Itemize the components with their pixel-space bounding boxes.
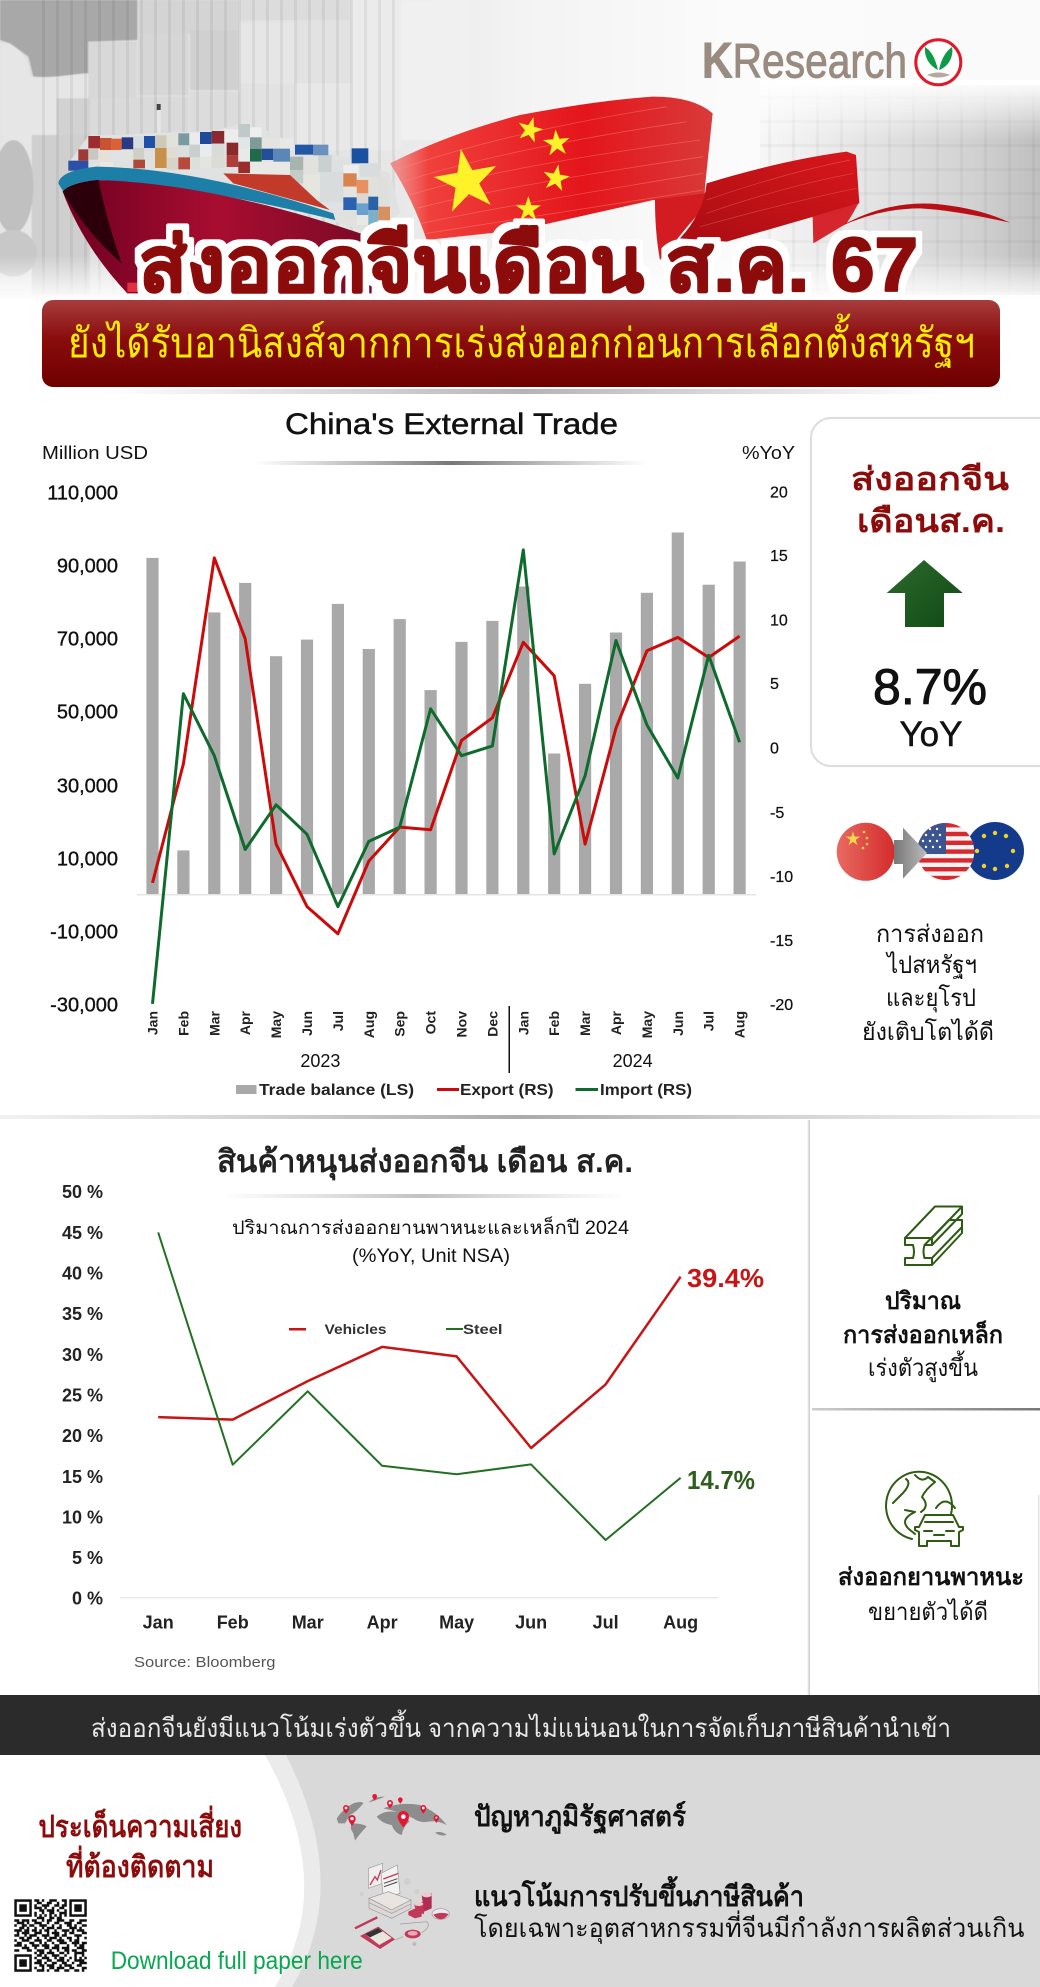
y axis labels: 30 % [62,1345,103,1365]
left axis labels [47,482,118,1016]
month labels [144,1010,748,1038]
x axis labels: Jan [143,1612,174,1632]
download link text: Download full paper here [111,1947,363,1975]
chart subtitle: ปริมาณการส่งออกยานพาหนะและเหล็กปี 2024 [232,1215,629,1239]
right axis labels [770,484,793,1014]
chart legend: Export (RS) [460,1082,554,1099]
month labels: May [268,1011,284,1038]
left axis labels: 30,000 [57,776,118,798]
chart legend: Import (RS) [600,1082,692,1099]
logo wordmark: KResearch [702,32,907,88]
month labels: Sep [392,1011,408,1037]
x axis labels: May [439,1612,474,1632]
year labels: 2023 [300,1051,340,1071]
flag stars [430,114,572,220]
month labels: Apr [237,1010,253,1035]
icon: tax documents illustration [355,1863,449,1949]
text: exports to US and Europe: ไปสหรัฐฯ [885,951,977,979]
month labels: Feb [546,1011,562,1036]
icon: globe and car [886,1472,963,1546]
export line [152,558,740,934]
vehicles line [158,1277,681,1448]
icon: up arrow [887,560,963,627]
icon: flags China to US and EU [837,822,1024,881]
x axis labels: Jun [515,1612,547,1632]
text: steel export volume: เร่งตัวสูงขึ้น [868,1350,978,1383]
left axis labels: 10,000 [57,848,118,870]
cargo ship [58,104,400,293]
left axis labels: 50,000 [57,702,118,724]
text: exports to US and Europe: การส่งออก [876,921,984,948]
QR code [11,1896,90,1975]
chart legend [236,1082,692,1099]
month labels: Jun [299,1011,315,1036]
x axis labels [143,1612,698,1632]
y axis labels: 20 % [62,1426,103,1446]
import line [152,550,740,1004]
right axis labels: -5 [770,805,784,822]
logo emblem [916,40,961,85]
month labels: Apr [608,1010,624,1035]
left axis labels: -10,000 [50,922,118,944]
y axis labels: 45 % [62,1223,103,1243]
left axis labels: 70,000 [57,628,118,650]
left axis labels: -30,000 [50,994,118,1016]
right column dividers [807,1120,1040,1695]
right axis labels: 10 [770,612,788,630]
subtitle banner [42,300,1000,387]
card heading [851,461,1009,539]
title: ส่งออกจีนเดือน ส.ค. 67 [139,223,918,308]
y axis labels: 15 % [62,1467,103,1487]
text: tariff trend: โดยเฉพาะอุตสาหกรรมที่จีนมีกำลังการผลิตส่วนเกิน [474,1910,1025,1944]
icon: steel beam [905,1206,962,1265]
month labels: Mar [206,1010,222,1036]
legend: Steel [463,1321,502,1337]
month labels: Jul [330,1011,346,1031]
text: vehicle exports: ขยายตัวได้ดี [868,1598,988,1626]
text: steel export volume: การส่งออกเหล็ก [843,1320,1003,1349]
month labels: Aug [361,1011,377,1038]
x axis labels: Apr [367,1612,398,1632]
legend [289,1321,502,1337]
text: steel export volume: ปริมาณ [885,1288,961,1315]
band: key message: ส่งออกจีนยังมีแนวโน้มเร่งตัวขึ้น จากความไม่แน่นอนในการจัดเก็บภาษีสินค้านำเข้า [91,1709,951,1743]
year labels [300,1051,653,1071]
steel line [158,1232,681,1540]
chart heading: สินค้าหนุนส่งออกจีน เดือน ส.ค. [217,1144,633,1181]
month labels: May [639,1011,655,1038]
right axis labels: 20 [770,484,788,502]
month labels: Jun [670,1011,686,1036]
card heading: เดือนส.ค. [857,503,1005,539]
right axis labels: -10 [770,869,793,886]
text: exports to US and Europe: ยังเติบโตได้ดี [862,1018,994,1046]
right axis labels: 5 [770,676,779,693]
text: tariff trend [474,1875,1025,1944]
chart: vehicle and steel export volume: (%YoY, Unit NSA) [352,1246,510,1267]
x axis labels: Feb [217,1612,249,1632]
y axis labels: 5 % [72,1548,103,1568]
chart: vehicle and steel export volume [62,1144,764,1671]
risk panel heading: ประเด็นความเสี่ยง [38,1805,242,1844]
right axis unit: %YoY [742,443,795,463]
text: steel export volume [843,1288,1003,1383]
left axis unit: Million USD [42,443,148,463]
month labels: Nov [454,1011,470,1037]
y axis labels [62,1182,103,1608]
y axis labels: 50 % [62,1182,103,1202]
month labels: Oct [423,1011,439,1034]
year labels: 2024 [613,1051,653,1071]
logo: KResearch [702,32,961,88]
right axis labels: -20 [770,997,793,1014]
text: geopolitical issues: ปัญหาภูมิรัฐศาสตร์ [474,1801,686,1835]
ribbon: Chinese flag [390,97,1010,260]
trade balance bars [146,532,746,895]
y axis labels: 40 % [62,1264,103,1284]
x axis labels: Mar [292,1612,324,1632]
source: Source: Bloomberg [134,1654,276,1671]
chart: China's External Trade [42,408,795,1099]
right axis labels: -15 [770,933,793,950]
growth figure: 8.7% [873,659,987,715]
left axis labels: 90,000 [57,556,118,578]
card heading: ส่งออกจีน [851,461,1009,497]
y axis labels: 0 % [72,1588,103,1608]
right axis labels: 0 [770,740,779,758]
risk panel heading [38,1805,242,1884]
month labels: Mar [577,1010,593,1036]
text: vehicle exports [838,1564,1024,1626]
right axis labels: 15 [770,548,788,565]
text: vehicle exports: ส่งออกยานพาหนะ [838,1564,1024,1591]
value label: steel: 14.7% [687,1465,755,1495]
y axis labels: 35 % [62,1304,103,1324]
left axis labels: 110,000 [47,482,118,504]
chart title: China's External Trade [285,408,618,441]
panel: risks to watch [0,1755,1040,1987]
text: exports to US and Europe [862,921,994,1046]
x axis labels: Aug [663,1612,698,1632]
y axis labels: 25 % [62,1386,103,1406]
month labels: Jan [144,1011,160,1035]
month labels: Aug [732,1011,748,1038]
y axis labels: 10 % [62,1508,103,1528]
month labels: Dec [484,1011,500,1037]
month labels: Jan [515,1011,531,1035]
text: tariff trend: แนวโน้มการปรับขึ้นภาษีสินค้า [474,1875,804,1912]
value label: vehicles: 39.4% [687,1263,764,1293]
icon: world map with pins [337,1794,447,1841]
month labels: Jul [701,1011,717,1031]
month labels: Feb [175,1011,191,1036]
x axis labels: Jul [593,1612,619,1632]
band: key message [0,1695,1040,1755]
card: export growth headline [811,418,1040,766]
text: exports to US and Europe: และยุโรป [886,984,976,1013]
chart legend: Trade balance (LS) [259,1082,414,1099]
growth unit: YoY [900,715,962,754]
legend: Vehicles [324,1321,387,1337]
hero background: container yard [0,0,1040,390]
risk panel heading: ที่ต้องติดตาม [66,1845,214,1884]
